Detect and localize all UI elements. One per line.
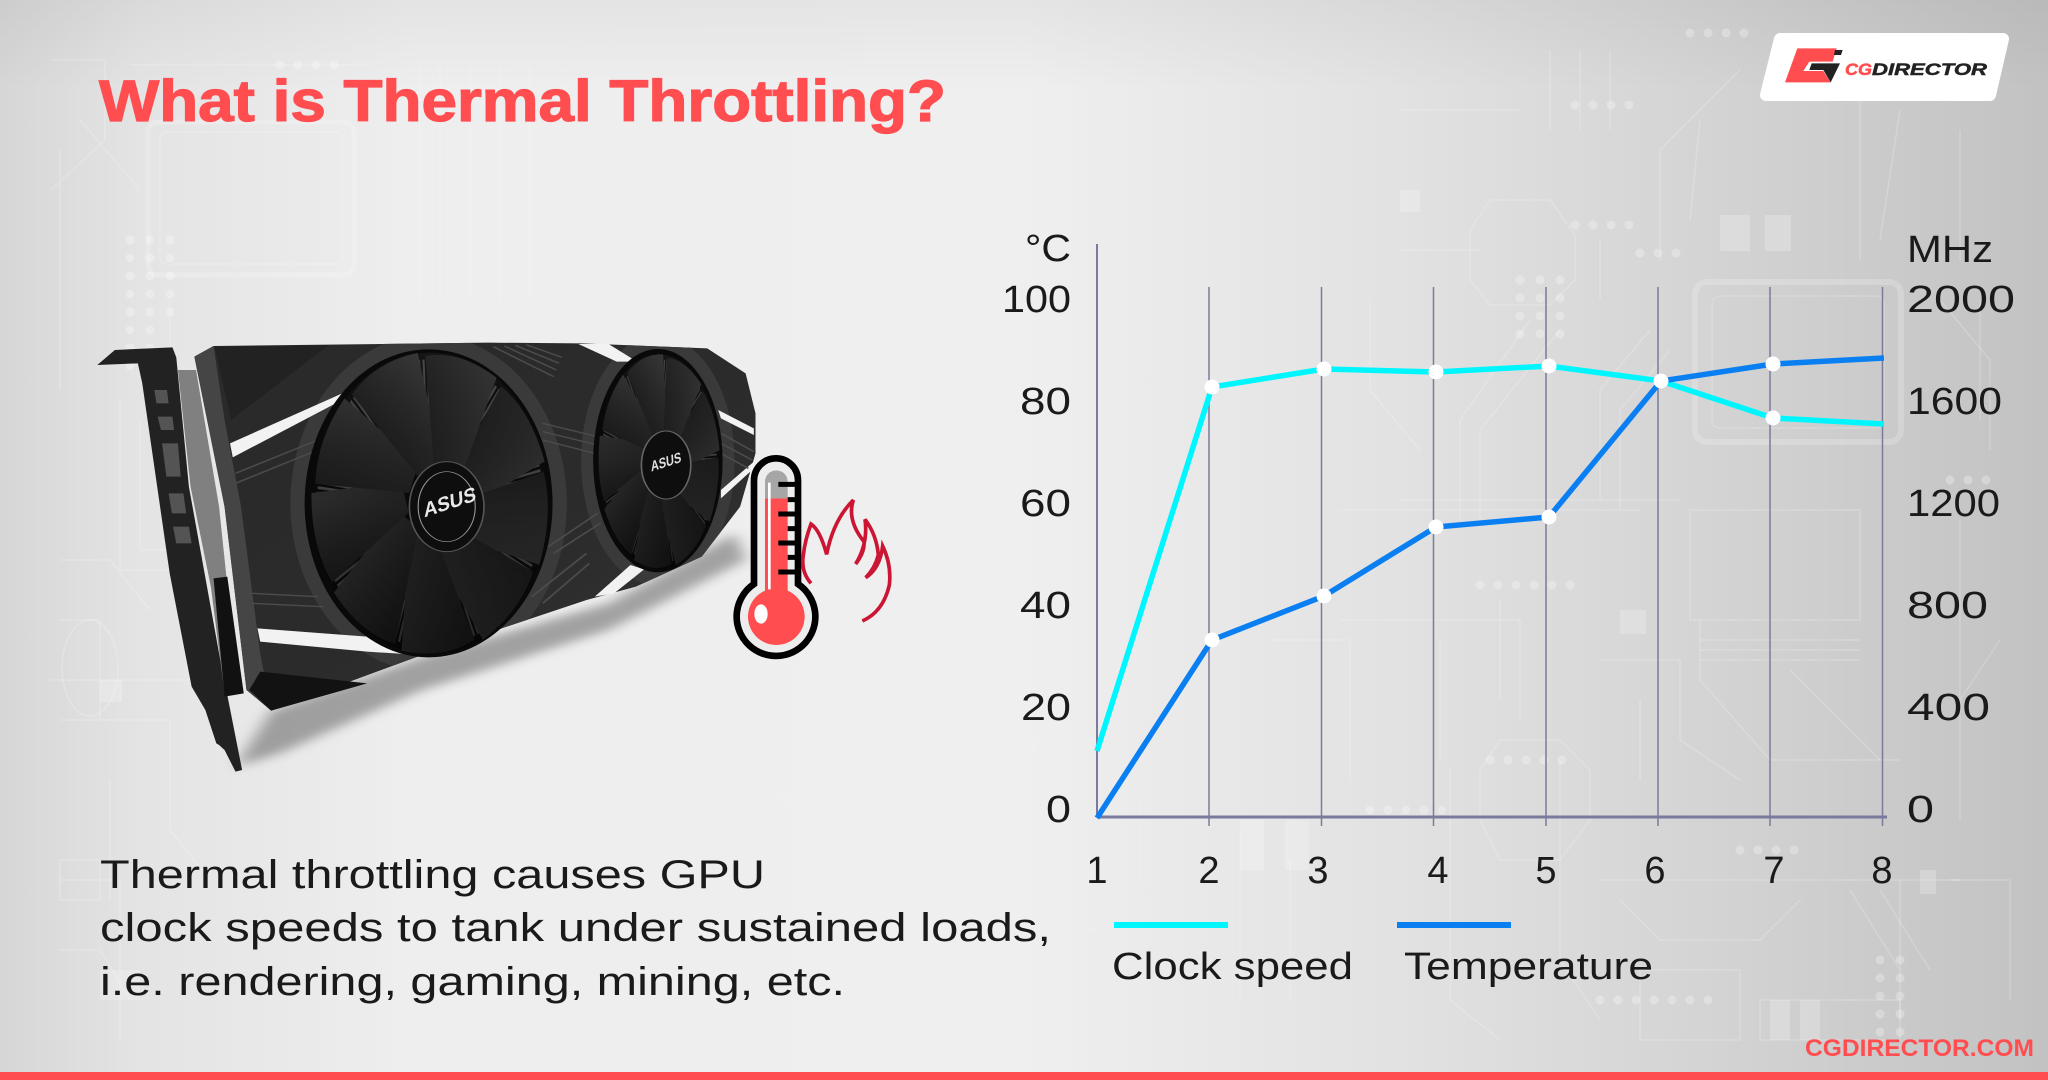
logo mark dark part bbox=[1809, 50, 1843, 82]
line chart bbox=[1002, 228, 2015, 892]
large fan bbox=[291, 320, 577, 688]
left axis labels: 60 bbox=[1020, 483, 1071, 525]
watermark blocks on the background bbox=[100, 190, 1936, 1040]
x axis labels: 4 bbox=[1427, 850, 1449, 892]
chart grid and axes bbox=[1097, 244, 1887, 826]
graphics card illustration bbox=[97, 320, 755, 772]
thermometer highlights bbox=[765, 483, 773, 589]
logo wordmark dark: DIRECTOR bbox=[1872, 60, 1988, 79]
body text line 3: i.e. rendering, gaming, mining, etc. bbox=[100, 960, 845, 1004]
legend: clock speed: Clock speed bbox=[1112, 946, 1353, 988]
left axis labels: 40 bbox=[1020, 585, 1071, 627]
card shadow bbox=[236, 533, 746, 767]
footer bar bbox=[0, 1072, 2048, 1080]
right axis labels: 1600 bbox=[1907, 381, 2002, 423]
x axis labels: 7 bbox=[1763, 850, 1785, 892]
x axis labels: 5 bbox=[1535, 850, 1557, 892]
card shroud bbox=[194, 343, 755, 711]
dark port block bbox=[214, 577, 244, 697]
small ASUS logo: ASUS bbox=[650, 450, 682, 476]
shroud upper-left panel bbox=[215, 345, 329, 420]
vent hatching bbox=[236, 345, 754, 607]
silver side strip bbox=[178, 370, 238, 693]
shroud lighter ridge around the fans bbox=[290, 335, 735, 672]
body text bbox=[100, 853, 1051, 1004]
right axis labels: 0 bbox=[1907, 789, 1934, 831]
thermometer tick marks bbox=[778, 484, 796, 572]
x axis labels: 2 bbox=[1198, 850, 1220, 892]
white accent stripes bbox=[230, 344, 754, 655]
lower dark shroud panel bbox=[249, 672, 367, 711]
logo: CGDirector bbox=[1766, 39, 2003, 95]
logo wordmark red: CG bbox=[1845, 60, 1872, 79]
metal bracket bbox=[97, 347, 242, 772]
thermometer body bbox=[737, 458, 815, 656]
x axis labels: 8 bbox=[1871, 850, 1893, 892]
left axis labels: 80 bbox=[1020, 381, 1071, 423]
title: What is Thermal Throttling? bbox=[99, 69, 946, 134]
small fan bbox=[585, 336, 733, 594]
logo mark bbox=[1785, 48, 1837, 82]
temperature line bbox=[1097, 358, 1884, 818]
large fan lighting bbox=[312, 353, 549, 654]
body text: Thermal throttling causes GPU bbox=[100, 853, 765, 897]
background top shading bbox=[0, 0, 2048, 90]
thermometer red fill bbox=[748, 498, 805, 645]
right axis labels: 2000 bbox=[1907, 279, 2015, 321]
shroud side bevel bbox=[194, 346, 271, 711]
heatsink fins behind the fan bbox=[359, 413, 501, 593]
small fan lighting bbox=[598, 354, 720, 569]
icon: flame bbox=[803, 500, 890, 621]
right axis labels: 400 bbox=[1907, 687, 1990, 729]
small fan fins bbox=[623, 398, 695, 526]
x axis labels: 1 bbox=[1086, 850, 1108, 892]
right axis labels: MHz bbox=[1907, 229, 1993, 271]
data point markers bbox=[1204, 356, 1780, 648]
x axis labels: 3 bbox=[1307, 850, 1329, 892]
bulb highlight bbox=[754, 604, 768, 624]
legend: temperature bbox=[1397, 922, 1653, 988]
bracket slots bbox=[154, 390, 192, 543]
x axis labels bbox=[1086, 850, 1893, 892]
right axis labels bbox=[1907, 229, 2015, 831]
right axis labels: 800 bbox=[1907, 585, 1988, 627]
legend: clock speed bbox=[1112, 922, 1353, 988]
left axis labels: °C bbox=[1025, 228, 1071, 270]
left axis labels: 100 bbox=[1002, 279, 1071, 321]
ASUS logo: ASUS bbox=[423, 483, 477, 522]
small fan hub bbox=[641, 431, 691, 499]
body text line 2: clock speeds to tank under sustained loads, bbox=[100, 906, 1051, 950]
left axis labels: 0 bbox=[1046, 789, 1071, 831]
clock speed line bbox=[1097, 366, 1884, 751]
icon: thermometer bbox=[737, 458, 815, 656]
left axis labels bbox=[1002, 228, 1071, 831]
legend: temperature: Temperature bbox=[1404, 946, 1653, 988]
right axis labels: 1200 bbox=[1907, 483, 2000, 525]
thermometer empty column bbox=[765, 470, 788, 498]
x axis labels: 6 bbox=[1644, 850, 1666, 892]
website credit: CGDIRECTOR.COM bbox=[1805, 1035, 2034, 1062]
left axis labels: 20 bbox=[1021, 687, 1071, 729]
fan hub bbox=[409, 462, 484, 552]
